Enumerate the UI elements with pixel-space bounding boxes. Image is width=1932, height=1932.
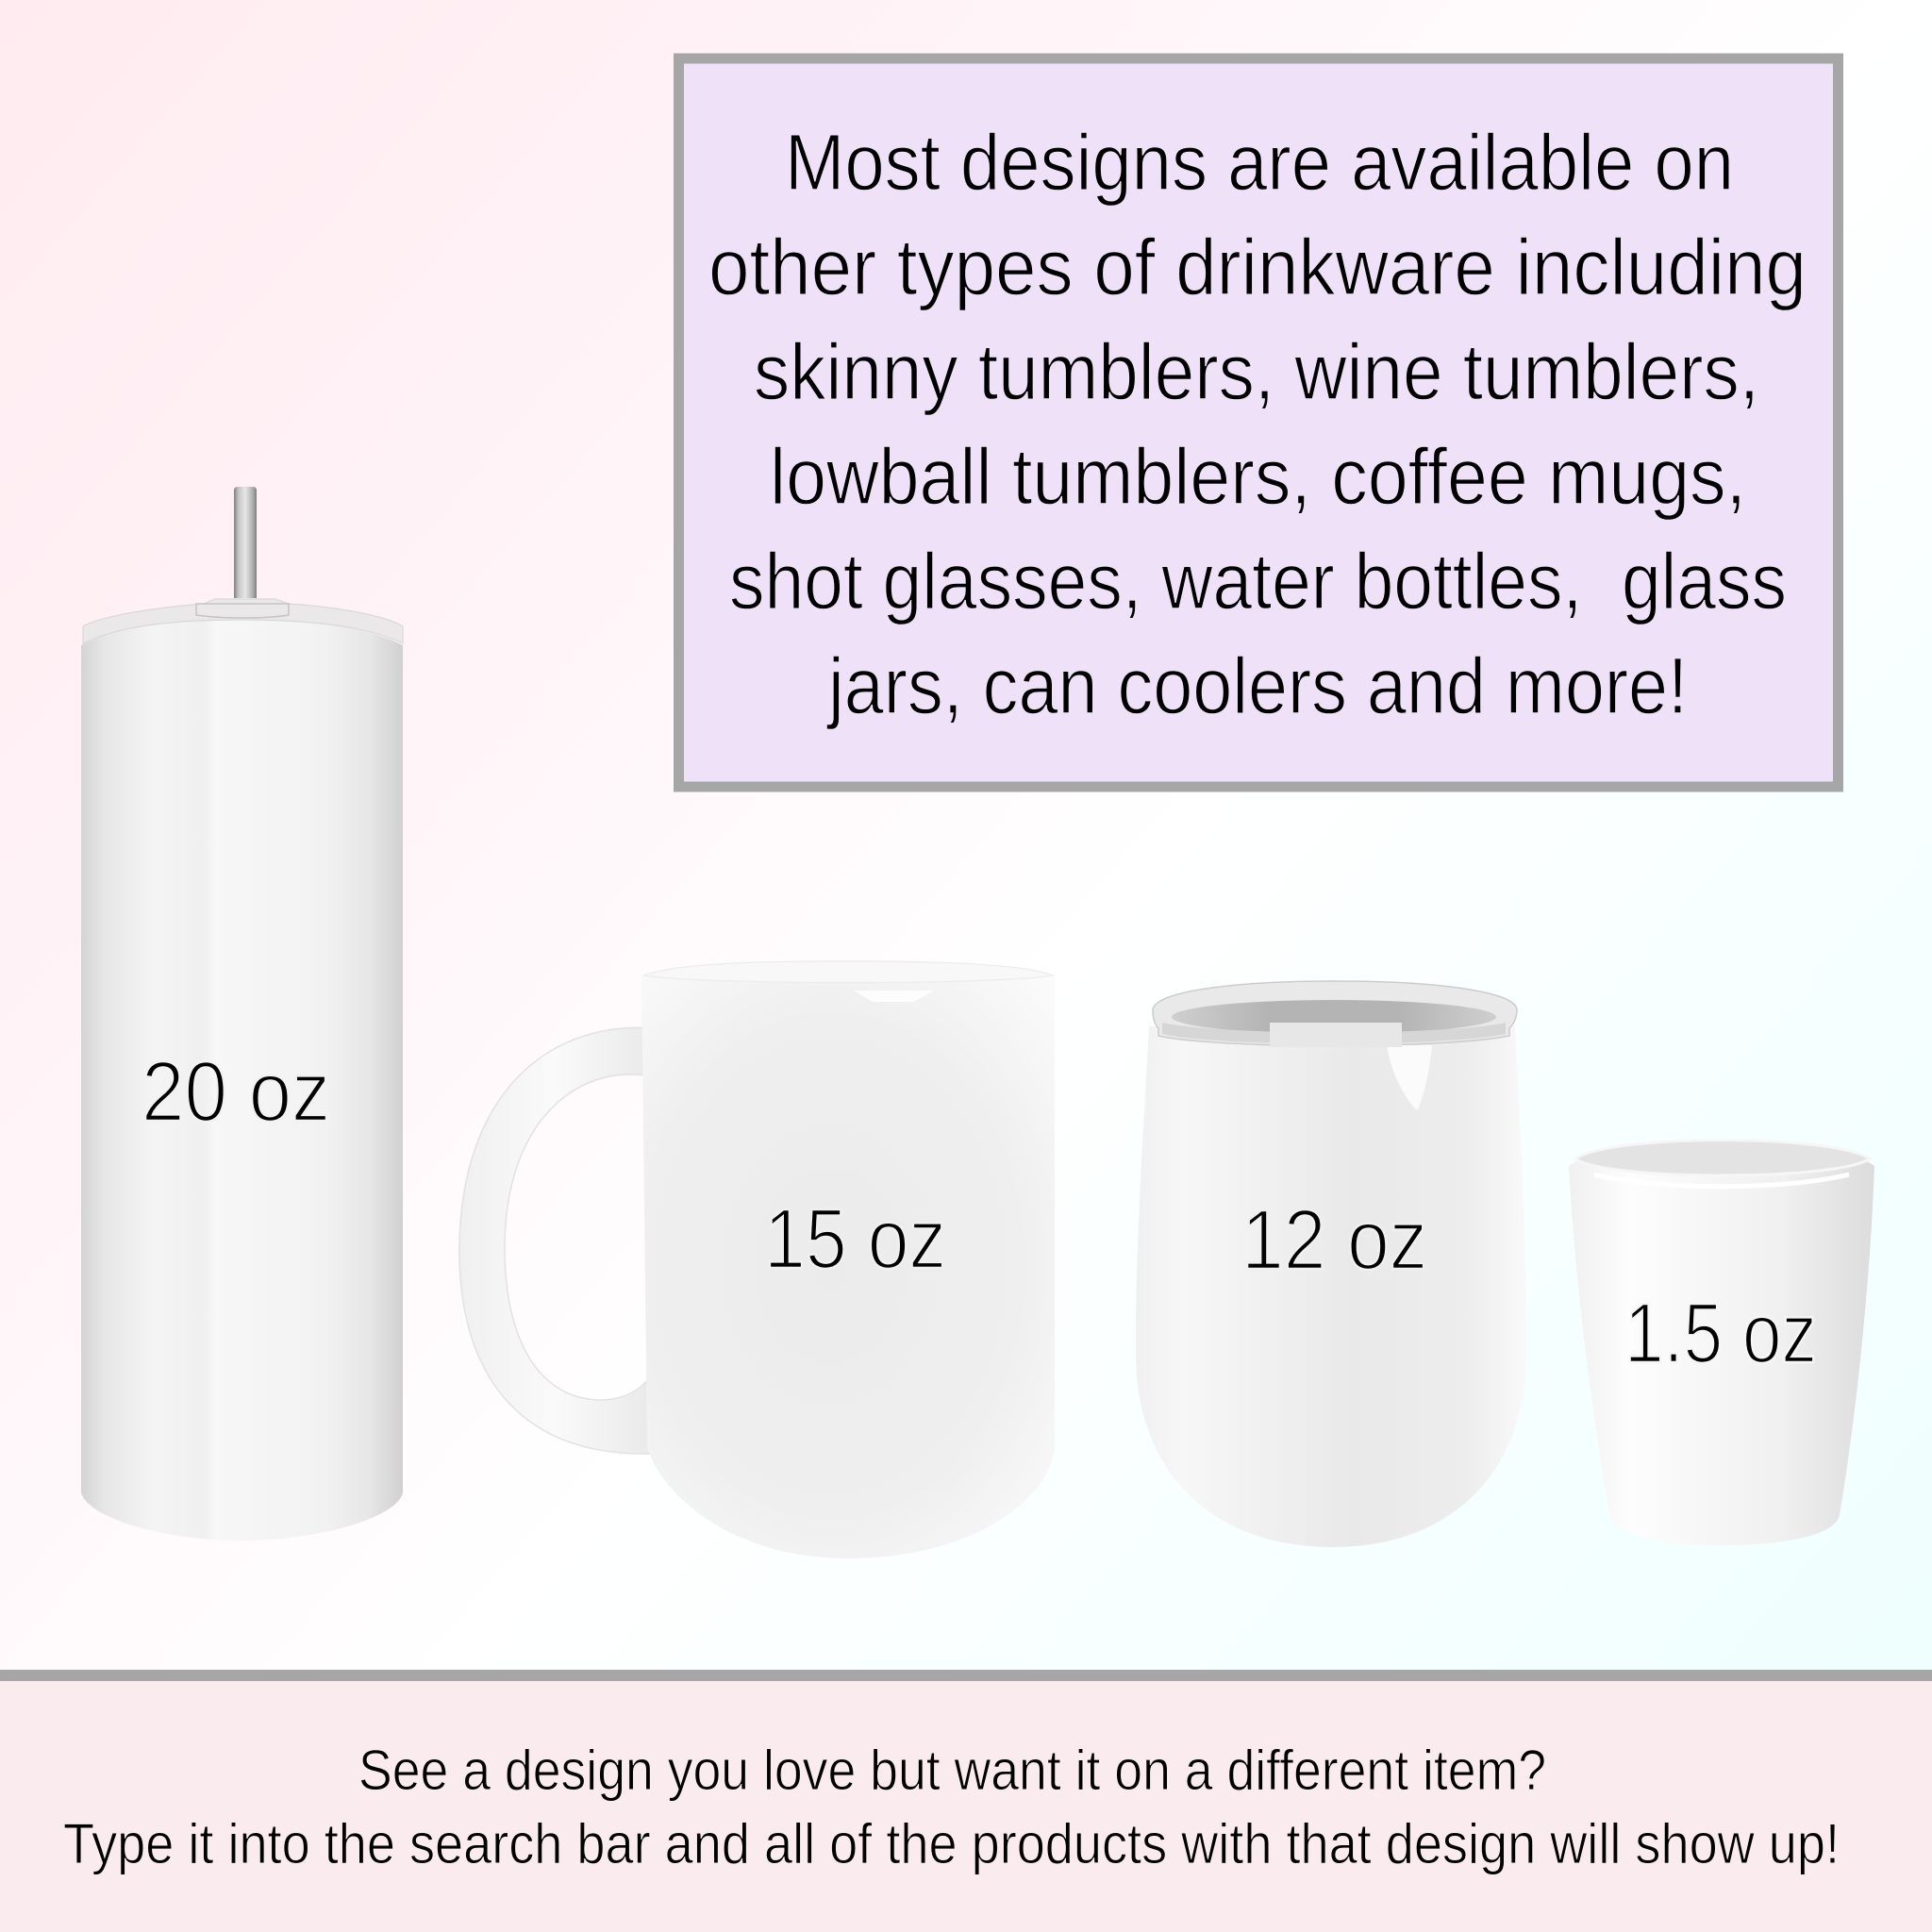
shot glass lip highlight	[1594, 1174, 1849, 1187]
wine tumbler body	[1136, 1026, 1526, 1547]
panel text: other types of drinkware including	[708, 223, 1807, 311]
panel text: jars, can coolers and more!	[825, 641, 1688, 730]
label: 1.5 oz: 1.5 oz	[1624, 1287, 1817, 1381]
clear lid	[1153, 981, 1517, 1045]
lid slider	[1270, 1023, 1402, 1047]
icon: straw	[234, 487, 257, 598]
panel text: Most designs are available on	[785, 118, 1734, 207]
footer text: See a design you love but want it on a different item?	[358, 1739, 1546, 1802]
mug handle	[459, 1027, 653, 1454]
highlight	[1387, 1045, 1432, 1110]
coffee mug 15 oz	[459, 960, 1055, 1558]
shot glass inner rim	[1575, 1140, 1870, 1175]
shot glass body	[1569, 1144, 1874, 1545]
panel text	[708, 118, 1807, 730]
skinny tumbler 20 oz	[81, 487, 403, 1541]
label: 12 oz: 12 oz	[1241, 1193, 1427, 1288]
panel text: lowball tumblers, coffee mugs,	[770, 432, 1746, 521]
panel: drinkware description	[679, 58, 1838, 787]
lid bottom band	[1162, 1023, 1506, 1043]
label: 15 oz: 15 oz	[764, 1192, 946, 1287]
mug rim	[643, 961, 1053, 983]
tumbler lid	[83, 599, 403, 643]
footer text	[63, 1739, 1840, 1875]
footer panel	[0, 1670, 1932, 1932]
tumbler body	[81, 620, 403, 1541]
wine tumbler 12 oz	[1136, 981, 1526, 1547]
panel text: skinny tumblers, wine tumblers,	[754, 327, 1759, 416]
shot glass 1.5 oz	[1569, 1140, 1874, 1545]
label: 20 oz: 20 oz	[142, 1045, 330, 1140]
panel text: shot glasses, water bottles, glass	[729, 537, 1787, 625]
lid opening	[1172, 1000, 1496, 1034]
lid tab	[196, 604, 289, 618]
rim highlight	[854, 991, 934, 1002]
mug body	[641, 960, 1055, 1558]
